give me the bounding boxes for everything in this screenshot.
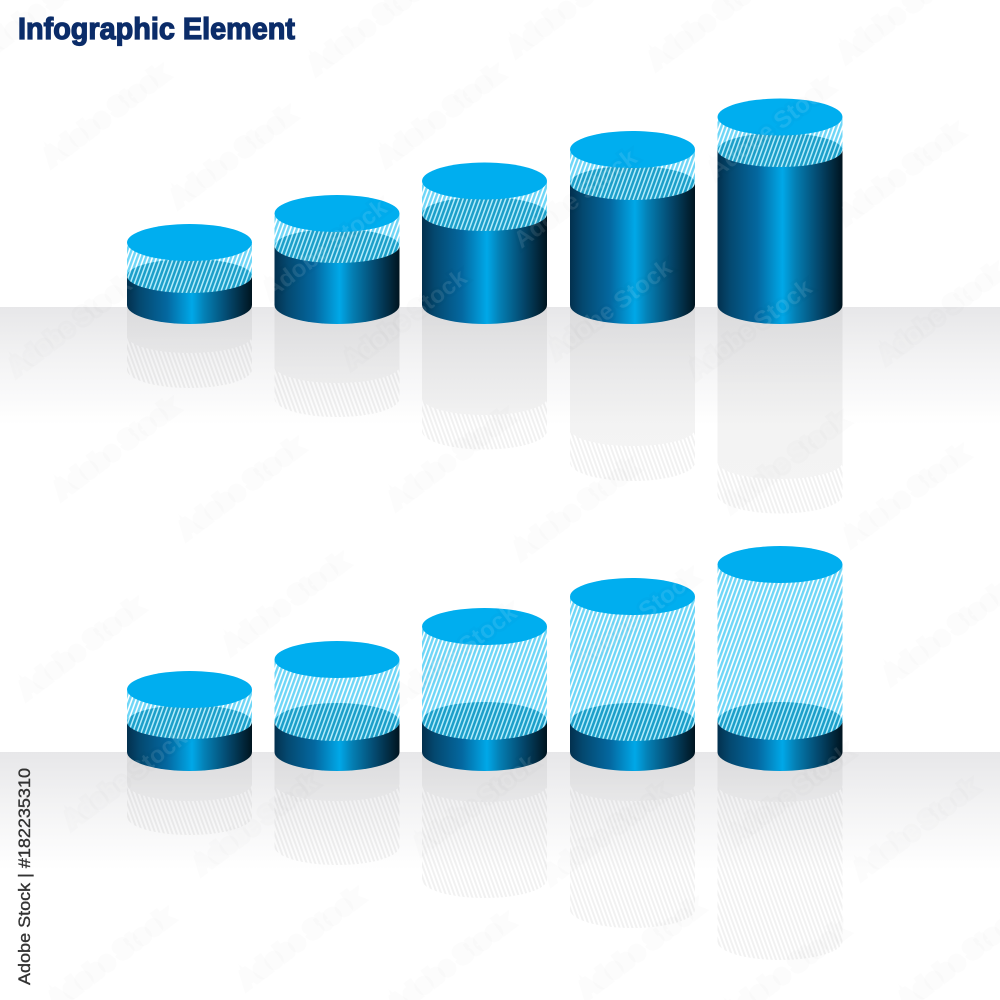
upper row: rising cylinder chart [127, 98, 842, 324]
watermark pattern: Adobe Stock [59, 724, 193, 834]
reflections: upper row [127, 306, 842, 514]
cylinder 2 lower [274, 641, 400, 771]
watermark pattern: Adobe Stock [539, 779, 673, 889]
watermark pattern: Adobe Stock [219, 549, 353, 659]
watermark pattern: Adobe Stock [724, 739, 858, 849]
watermark pattern: Adobe Stock [704, 74, 838, 184]
cylinder 4 lower [570, 578, 695, 771]
watermark pattern: Adobe Stock [234, 884, 368, 994]
cylinder 1 upper [127, 224, 252, 324]
title: Infographic Element [18, 11, 295, 46]
lower row: rising hatched cylinder chart [127, 546, 842, 771]
watermark pattern: Adobe Stock [49, 394, 183, 504]
floor: lower row [0, 752, 1000, 870]
watermark pattern: Adobe Stock [719, 407, 853, 517]
cylinder 3 lower [422, 608, 547, 771]
watermark pattern: Adobe Stock [389, 599, 523, 709]
watermark pattern: Adobe Stock [849, 774, 983, 884]
cylinder 5 lower [718, 546, 842, 771]
stock id side label: Adobe Stock | #182235310 [16, 768, 34, 985]
watermark pattern: Adobe Stock [189, 769, 323, 879]
cylinder 2 upper [274, 195, 400, 324]
reflections: lower row [127, 753, 842, 960]
watermark pattern: Adobe Stock [509, 454, 643, 564]
watermark pattern: Adobe Stock [259, 194, 393, 304]
watermark pattern: Adobe Stock [166, 102, 300, 212]
watermark pattern: Adobe Stock [174, 434, 308, 544]
watermark pattern: Adobe Stock [684, 274, 818, 384]
watermark pattern: Adobe Stock [409, 749, 543, 859]
cylinder 1 lower [127, 671, 252, 771]
watermark pattern: Adobe Stock [834, 119, 968, 229]
floor: upper row [0, 307, 1000, 425]
watermark pattern: Adobe Stock [384, 404, 518, 514]
watermark pattern: Adobe Stock [839, 441, 973, 551]
watermark pattern: Adobe Stock [39, 61, 173, 171]
watermark pattern: Adobe Stock [544, 254, 678, 364]
watermark pattern: Adobe Stock [14, 594, 148, 704]
cylinder 5 upper [718, 98, 842, 324]
watermark pattern: Adobe Stock [339, 264, 473, 374]
watermark pattern: Adobe Stock [4, 271, 138, 381]
watermark pattern: Adobe Stock [569, 564, 703, 674]
watermark pattern: Adobe Stock [374, 61, 508, 171]
cylinder 4 upper [570, 131, 695, 324]
cylinder 3 upper [422, 162, 547, 324]
watermark pattern: Adobe Stock [509, 144, 643, 254]
